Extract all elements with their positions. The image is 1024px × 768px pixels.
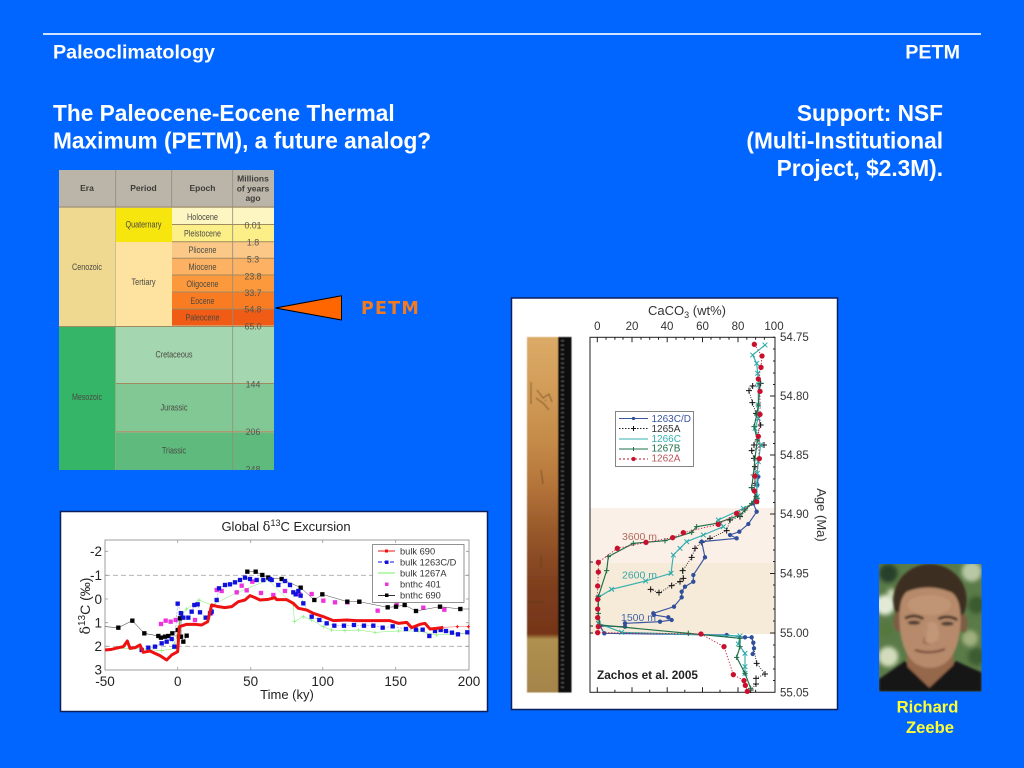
top axis labels: 20 — [626, 321, 638, 333]
right axis labels: 54.95 — [780, 568, 809, 580]
table row labels: Tertiary — [132, 277, 156, 287]
depth label: 1500 m: 1500 m — [621, 612, 656, 624]
chart x-axis tick labels: 0 — [174, 674, 181, 689]
chart y-axis tick labels — [90, 544, 102, 678]
support text: Support: NSF — [797, 100, 943, 126]
table row labels: Pliocene — [188, 245, 217, 255]
series: bulk 1267A — [112, 580, 468, 651]
site legend: 1262A — [652, 454, 681, 464]
table age numbers: 33.7 — [244, 288, 262, 298]
shaded depth bands — [590, 508, 774, 563]
chart y-axis tick labels: 1 — [94, 616, 102, 630]
site legend: 1265A — [652, 424, 681, 435]
table column headers: Millions — [237, 174, 269, 184]
top axis labels: 60 — [696, 321, 709, 333]
chart data series — [105, 572, 469, 660]
top axis labels — [594, 321, 784, 333]
caption: Richard Zeebe: Zeebe — [906, 718, 954, 737]
table age numbers: 248 — [246, 464, 260, 474]
table column headers: ago — [245, 193, 261, 203]
table age numbers: 23.8 — [244, 271, 262, 281]
chart x-axis tick labels: 100 — [311, 674, 334, 689]
chart x-axis tick labels: -50 — [95, 674, 115, 689]
chart title: CaCO — [648, 303, 684, 318]
table row labels: Cenozoic — [72, 262, 102, 272]
table column headers: Period — [130, 183, 157, 193]
chart y-axis tick labels: 3 — [94, 662, 102, 678]
right axis labels: 55.00 — [780, 628, 809, 640]
chart data series — [598, 344, 765, 691]
chart y-axis tick labels: 0 — [94, 592, 102, 607]
citation: Zachos et al. 2005 — [597, 668, 698, 682]
site legend: 1266C — [652, 434, 681, 445]
caption: Richard Zeebe: Richard — [897, 698, 958, 716]
chart legend: bulk 1263C/D — [400, 558, 457, 568]
chart y-axis tick labels: -2 — [90, 544, 102, 559]
chart title: C Excursion — [280, 519, 351, 534]
series: 1263C/D — [600, 477, 758, 654]
chart title: 13 — [270, 518, 280, 528]
table age numbers: 54.8 — [244, 304, 262, 314]
chart title: Global δ — [221, 519, 270, 535]
table row labels — [72, 212, 221, 456]
table row labels: Eocene — [190, 296, 215, 306]
table row labels: Mesozoic — [72, 392, 102, 402]
series: 1262A — [598, 344, 762, 691]
table row labels: Miocene — [188, 262, 217, 272]
table age numbers: 65.0 — [244, 322, 262, 332]
table row labels: Quaternary — [126, 220, 162, 230]
chart x-axis tick labels: 50 — [243, 674, 258, 689]
series: 1266C — [598, 345, 765, 673]
support text: Project, $2.3M). — [777, 155, 943, 181]
photo: Richard Zeebe portrait — [875, 562, 985, 692]
chart y-axis title: δ — [78, 626, 94, 634]
chart y-axis title: 13 — [77, 614, 88, 626]
chart x-axis tick labels: 200 — [458, 674, 480, 689]
table column headers — [80, 174, 270, 203]
chart y-axis tick labels: -1 — [90, 568, 102, 583]
panel: global carbon isotope excursion chart — [60, 512, 488, 712]
table column headers: of years — [237, 183, 270, 193]
title: The Paleocene-Eocene Thermal — [53, 100, 395, 126]
depth label: 2600 m: 2600 m — [622, 570, 657, 582]
panel: geologic time scale table — [59, 170, 274, 474]
chart legend: bnthc 401 — [400, 580, 441, 590]
table age numbers: 144 — [246, 379, 260, 389]
top axis labels: 40 — [661, 321, 673, 333]
series: bulk 1263C/D — [142, 578, 467, 650]
header: section name: Paleoclimatology — [53, 42, 215, 64]
chart title: 3 — [684, 310, 689, 320]
chart title: (wt%) — [689, 303, 726, 318]
arrow: PETM pointer — [276, 296, 342, 320]
series: bnthc 690 — [105, 613, 187, 642]
table age numbers: 206 — [246, 427, 260, 437]
chart legend: bulk 690 — [400, 546, 435, 556]
sediment core image — [527, 337, 572, 692]
table row labels: Paleocene — [186, 312, 220, 322]
table row labels: Holocene — [187, 212, 218, 222]
table row labels: Oligocene — [186, 279, 219, 289]
chart legend — [372, 544, 464, 602]
table column headers: Era — [80, 183, 94, 193]
chart x-axis tick labels: 150 — [384, 674, 407, 689]
table column headers: Epoch — [190, 183, 215, 193]
chart x-axis title: Time (ky) — [260, 687, 314, 702]
top axis labels: 100 — [764, 321, 784, 333]
right axis labels: 54.90 — [780, 509, 809, 521]
table row labels: Pleistocene — [184, 228, 221, 238]
site legend: 1267B — [652, 444, 681, 454]
site legend: 1263C/D — [652, 414, 691, 425]
chart x-axis tick labels — [95, 674, 480, 689]
depth label: 3600 m: 3600 m — [622, 531, 657, 543]
table age numbers: 1.8 — [247, 237, 259, 247]
top axis labels: 0 — [594, 321, 601, 333]
header: topic: PETM — [905, 42, 960, 64]
series: 1267B — [598, 383, 760, 688]
title: Maximum (PETM), a future analog? — [53, 128, 431, 154]
table row labels: Cretaceous — [156, 350, 193, 360]
series: bnthc 401 — [161, 582, 444, 624]
right axis labels: 54.85 — [780, 450, 809, 462]
right axis title: Age (Ma) — [814, 488, 829, 542]
chart y-axis title: C (‰) — [77, 578, 93, 615]
right axis labels: 54.80 — [780, 391, 809, 403]
table age numbers: 0.01 — [244, 220, 262, 230]
series: 1265A — [651, 383, 764, 593]
panel: CaCO3 core chart — [512, 298, 838, 710]
table row labels: Triassic — [162, 446, 186, 456]
series: bulk 690 — [105, 596, 443, 660]
top axis labels: 80 — [732, 321, 744, 333]
chart legend: bnthc 690 — [400, 590, 441, 600]
right axis labels: 55.05 — [780, 688, 809, 700]
right axis labels: 54.75 — [780, 332, 809, 344]
right axis labels — [780, 332, 809, 700]
site legend — [616, 412, 694, 466]
support text: (Multi-Institutional — [746, 128, 943, 154]
table age numbers — [244, 220, 262, 474]
label: PETM: PETM — [361, 299, 420, 319]
table row labels: Jurassic — [160, 402, 188, 412]
table age numbers: 5.3 — [247, 254, 259, 264]
chart y-axis tick labels: 2 — [94, 639, 102, 654]
chart legend: bulk 1267A — [400, 568, 447, 578]
